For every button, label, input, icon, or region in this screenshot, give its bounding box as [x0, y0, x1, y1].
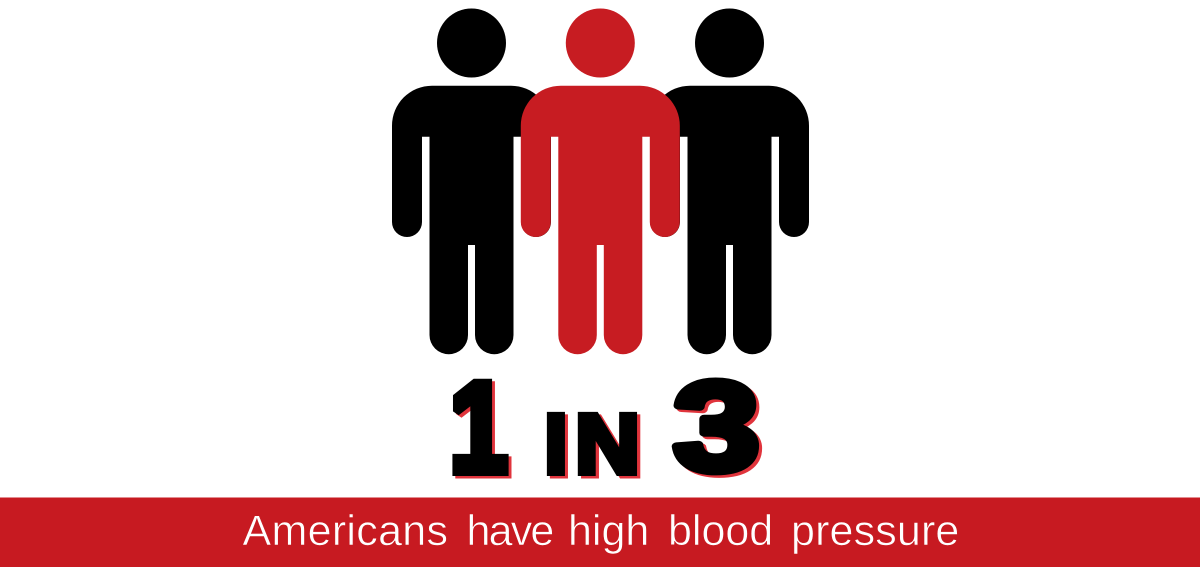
numeral 3: 3 [676, 358, 763, 500]
letter I: I [544, 397, 568, 491]
banner text: high [568, 507, 649, 555]
banner text: blood [668, 507, 773, 555]
letter I: I [547, 400, 571, 494]
banner text: Americans [242, 507, 448, 555]
numeral 3: 3 [673, 356, 760, 498]
icon: center person, red [521, 8, 680, 354]
banner [0, 498, 1200, 567]
heading: 1 in 3 [450, 356, 763, 501]
banner text: have [466, 507, 553, 555]
letter N: N [578, 400, 643, 494]
letter N: N [575, 398, 640, 491]
icon: left person, black [392, 8, 551, 354]
numeral 1: 1 [450, 356, 508, 499]
banner text: pressure [791, 507, 960, 555]
numeral 1: 1 [452, 358, 511, 501]
icon: right person, black [650, 8, 809, 354]
